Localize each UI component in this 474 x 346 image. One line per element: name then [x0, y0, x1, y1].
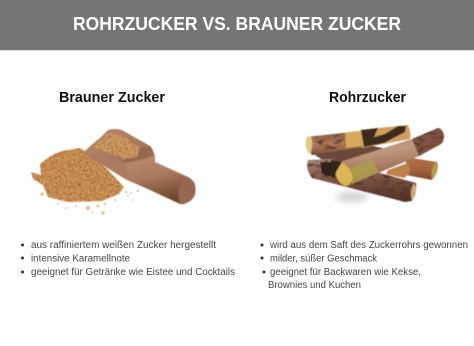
bullet list: cane sugar: milder, süßer Geschmack — [270, 254, 378, 264]
heading: Brauner Zucker: Brauner Zucker — [59, 90, 165, 106]
bullet list: cane sugar: geeignet für Backwaren wie Kekse, — [270, 267, 421, 278]
header band with title — [0, 0, 474, 51]
bullet list: brown sugar: aus raffiniertem weißen Zucker hergestellt — [31, 240, 216, 251]
wooden scoop — [83, 129, 195, 204]
bullet list: cane sugar: wird aus dem Saft des Zuckerrohrs gewonnen — [269, 240, 468, 251]
image: sugarcane stalks — [306, 125, 444, 202]
title: ROHRZUCKER VS. BRAUNER ZUCKER — [73, 13, 401, 34]
cast shadow — [336, 192, 368, 202]
sugar pile — [31, 148, 139, 215]
cane stalks — [306, 125, 444, 202]
bullet list: brown sugar: geeignet für Getränke wie Eistee und Cocktails — [31, 267, 235, 278]
bullet list: brown sugar: intensive Karamellnote — [31, 254, 130, 264]
bullet list: cane sugar — [260, 240, 468, 291]
bullet list: brown sugar — [21, 240, 235, 278]
image: brown sugar pile with wooden scoop — [31, 129, 195, 215]
bullet list: cane sugar: Brownies und Kuchen — [268, 280, 361, 291]
heading: Rohrzucker: Rohrzucker — [329, 90, 406, 106]
